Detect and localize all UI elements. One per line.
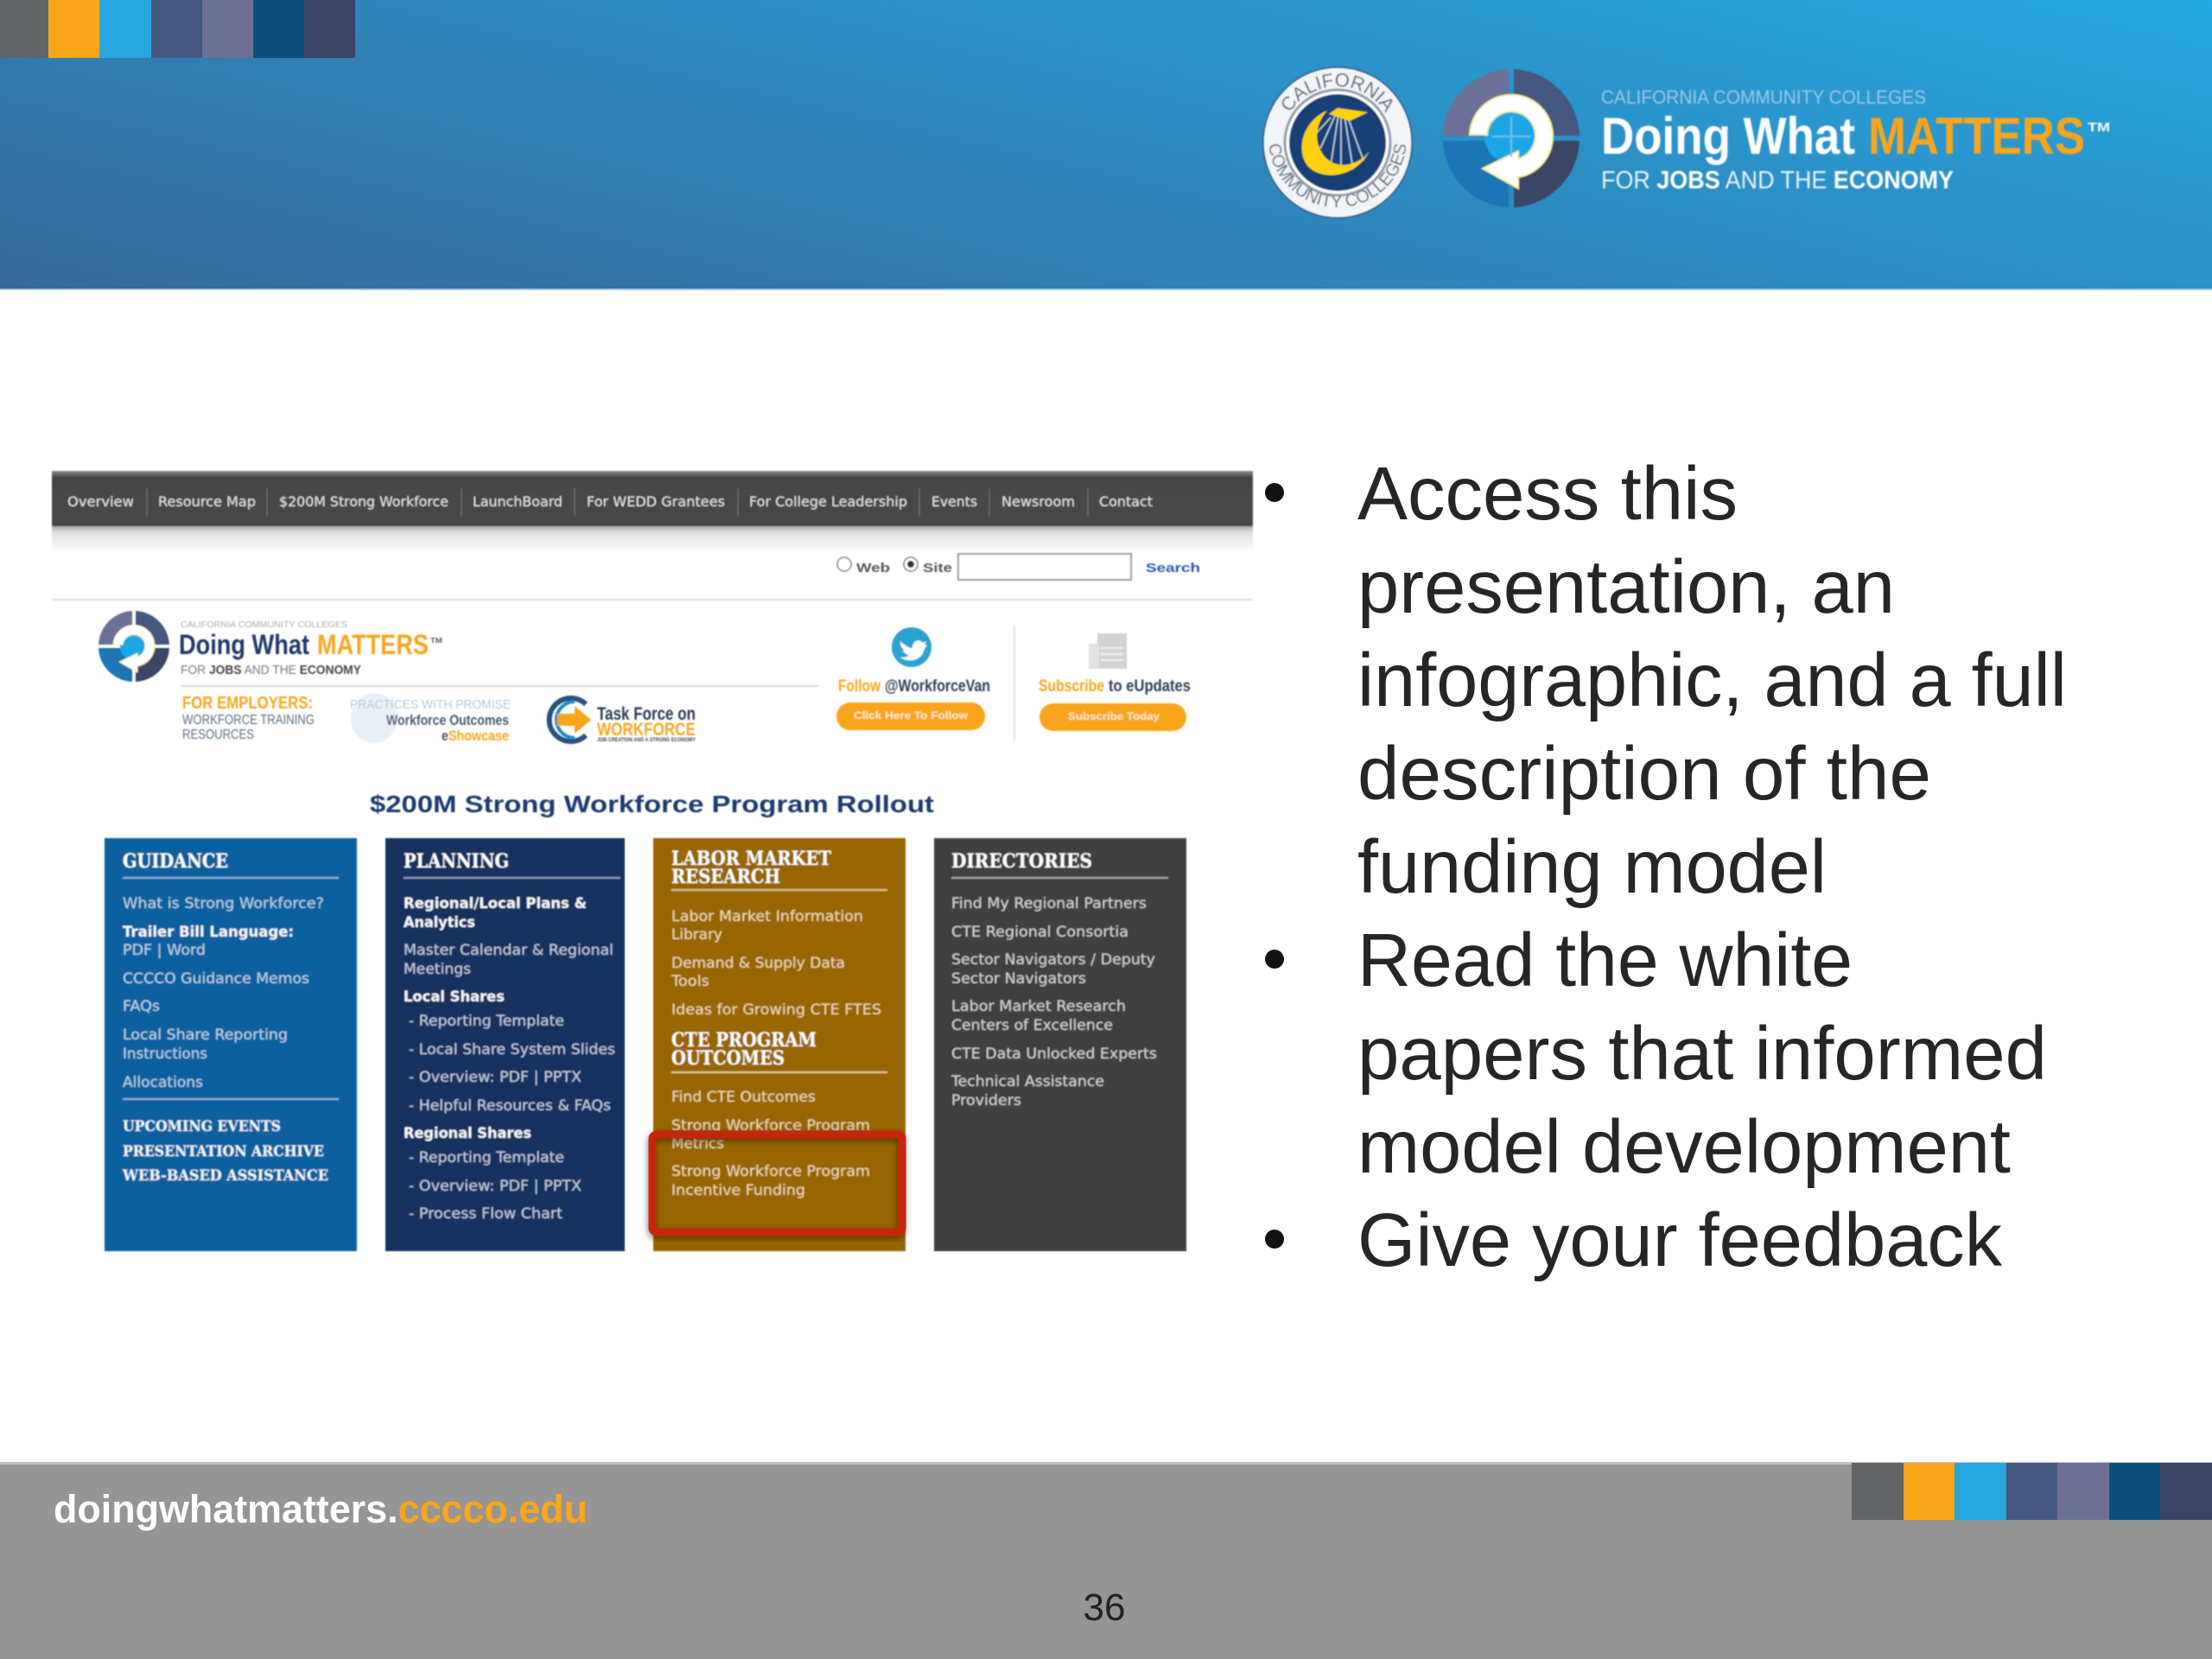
small logo wordmark: Doing What [179, 629, 309, 660]
panel: labor market research: Library [671, 926, 722, 944]
panel: labor market research: LABOR MARKET [671, 848, 832, 870]
icon: California Community Colleges seal: CALIFORNIA [1281, 73, 1393, 113]
panel: guidance: PRESENTATION ARCHIVE [123, 1143, 324, 1160]
panel: planning: Regional/Local Plans & [404, 895, 587, 912]
header logo wordmark: CALIFORNIA COMMUNITY COLLEGES [1601, 86, 1926, 108]
panel: planning: Analytics [404, 914, 475, 931]
small logo wordmark: FOR JOBS AND THE ECONOMY [181, 663, 361, 677]
footer band [0, 1462, 2212, 1659]
icon: California Community Colleges seal [1262, 66, 1414, 219]
subscribe call to action: Subscribe Today [1068, 710, 1160, 722]
small logo wordmark: MATTERS [317, 629, 429, 660]
panel: planning: Regional Shares [404, 1125, 531, 1142]
link: for employers: RESOURCES [182, 728, 254, 742]
panel: directories: DIRECTORIES [951, 850, 1092, 873]
bullet list: papers that informed [1357, 1012, 2047, 1096]
panel: guidance: UPCOMING EVENTS [123, 1118, 281, 1135]
callout: red highlight box [652, 1135, 902, 1232]
site navigation bar: Newsroom [1001, 493, 1075, 510]
site navigation bar [52, 471, 1253, 552]
panel: labor market research: Find CTE Outcomes [671, 1089, 816, 1106]
link: for employers: WORKFORCE TRAINING [182, 713, 315, 728]
panel: guidance: Instructions [123, 1046, 207, 1063]
link: task force on workforce [550, 698, 696, 743]
site search form: Site [923, 561, 952, 575]
panel: labor market research: Strong Workforce Program [671, 1163, 870, 1180]
subscribe call to action: Subscribe [1039, 677, 1104, 696]
panel: labor market research: Incentive Funding [671, 1182, 805, 1199]
site navigation bar: For College Leadership [749, 493, 907, 510]
panel: planning: - Helpful Resources & FAQs [409, 1097, 611, 1115]
panel: guidance: WEB-BASED ASSISTANCE [122, 1167, 328, 1185]
header band [0, 0, 2212, 290]
follow call to action: Click Here To Follow [854, 709, 969, 721]
subscribe call to action [1039, 677, 1191, 731]
icon: Doing What Matters circular logo [1443, 69, 1580, 207]
panel: labor market research: Metrics [671, 1135, 724, 1153]
panel: directories [934, 838, 1186, 1251]
bullet list: description of the [1357, 732, 1931, 816]
link: task force on workforce: Task Force on [597, 704, 696, 724]
panel: guidance: What is Strong Workforce? [123, 895, 324, 912]
panel: planning: - Reporting Template [409, 1013, 564, 1030]
site search form: Search [1146, 561, 1200, 575]
panel: planning: - Process Flow Chart [409, 1205, 563, 1223]
header logo wordmark: TM [2088, 120, 2110, 135]
panel: planning: - Local Share System Slides [409, 1041, 615, 1058]
page number: 36 [1084, 1586, 1125, 1629]
panel: directories: Sector Navigators / Deputy [951, 951, 1155, 969]
header logo wordmark: Doing What [1601, 107, 1855, 165]
panel: directories: Sector Navigators [951, 970, 1086, 988]
link: for employers [182, 694, 315, 742]
header logo wordmark: MATTERS [1868, 107, 2085, 165]
panel: directories: Centers of Excellence [951, 1017, 1113, 1034]
site navigation bar: LaunchBoard [473, 493, 563, 510]
panel: planning: Local Shares [404, 988, 505, 1006]
link: practices with promise: Workforce Outcomes [386, 712, 509, 728]
screenshot heading: $200M Strong Workforce Program Rollout [370, 791, 934, 817]
bullet list [1265, 452, 2067, 1282]
panel: planning: PLANNING [404, 850, 509, 873]
link: practices with promise: PRACTICES WITH PROMISE [350, 697, 511, 712]
link: task force on workforce: JOB CREATION AND A STRONG ECONOMY [597, 738, 696, 743]
small logo wordmark: CALIFORNIA COMMUNITY COLLEGES [181, 620, 347, 630]
panel: planning: Master Calendar & Regional [404, 942, 613, 959]
colour strip: footer right [1852, 1463, 2212, 1520]
panel: guidance: Allocations [123, 1074, 203, 1091]
bullet list: Access this [1357, 452, 1738, 536]
footer website address: doingwhatmatters.cccco.edu [54, 1487, 588, 1531]
header logo wordmark [1601, 86, 2110, 194]
panel: labor market research: Ideas for Growing CTE FTES [671, 1001, 881, 1019]
website screenshot [52, 471, 1253, 1251]
panel: directories: CTE Regional Consortia [951, 924, 1128, 941]
site navigation bar: $200M Strong Workforce [279, 493, 448, 510]
panel: directories: Providers [951, 1092, 1021, 1109]
subscribe call to action: to eUpdates [1109, 677, 1191, 696]
bullet list: Read the white [1357, 918, 1853, 1002]
panel: labor market research [653, 838, 906, 1251]
bullet list: Give your feedback [1357, 1198, 2002, 1282]
link: for employers: FOR EMPLOYERS: [182, 694, 313, 713]
colour strip: top left [0, 0, 355, 58]
small logo wordmark [179, 620, 442, 677]
link: practices with promise [350, 693, 511, 744]
panel: planning: - Overview: PDF | PPTX [409, 1069, 582, 1086]
site navigation bar: Overview [67, 493, 134, 510]
panel: guidance [105, 838, 357, 1251]
panel: planning [385, 838, 625, 1251]
link: practices with promise: eShowcase [442, 728, 509, 744]
icon: small Doing What Matters logo [99, 611, 169, 682]
panel: labor market research: Strong Workforce Program [671, 1117, 870, 1135]
panel: labor market research: Tools [671, 973, 709, 990]
panel: guidance: FAQs [123, 998, 160, 1015]
panel: labor market research: Labor Market Information [671, 908, 863, 925]
follow call to action: Follow [838, 677, 880, 696]
panel: labor market research: RESEARCH [671, 866, 780, 888]
bullet list: infographic, and a full [1357, 639, 2067, 722]
panel: planning: Meetings [404, 961, 471, 978]
site search form: Web [856, 561, 890, 575]
header logo wordmark: FOR JOBS AND THE ECONOMY [1601, 167, 1954, 194]
panel: directories: Labor Market Research [951, 998, 1126, 1015]
link: task force on workforce: WORKFORCE [597, 720, 696, 740]
bullet list: presentation, an [1357, 545, 1895, 629]
bullet list: model development [1357, 1105, 2011, 1189]
site navigation bar: Contact [1099, 493, 1153, 510]
panel: planning: - Reporting Template [409, 1149, 564, 1166]
panel: labor market research: Demand & Supply Data [671, 955, 845, 972]
icon: California Community Colleges seal: COMMUNITY COLLEGES [1268, 143, 1407, 208]
panel: directories: Technical Assistance [950, 1073, 1104, 1090]
panel: directories: Find My Regional Partners [951, 895, 1147, 912]
panel: guidance: PDF | Word [123, 942, 206, 959]
panel: labor market research: OUTCOMES [671, 1047, 785, 1070]
panel: guidance: CCCCO Guidance Memos [123, 970, 309, 988]
icon: newsletter [1089, 633, 1127, 669]
panel: guidance: Local Share Reporting [123, 1027, 288, 1044]
site navigation bar: For WEDD Grantees [587, 493, 725, 510]
panel: planning: - Overview: PDF | PPTX [409, 1178, 582, 1195]
site navigation bar: Events [931, 493, 977, 510]
bullet list: funding model [1357, 825, 1827, 909]
follow call to action [836, 677, 990, 730]
site search form [837, 554, 1200, 580]
panel: guidance: GUIDANCE [123, 850, 228, 873]
site navigation bar: Resource Map [158, 493, 256, 510]
panel: labor market research: CTE PROGRAM [671, 1029, 817, 1052]
panel: directories: CTE Data Unlocked Experts [951, 1046, 1157, 1063]
follow call to action: @WorkforceVan [885, 677, 990, 696]
panel: guidance: Trailer Bill Language: [123, 924, 294, 941]
icon: twitter [892, 627, 931, 667]
small logo wordmark: TM [430, 637, 442, 645]
